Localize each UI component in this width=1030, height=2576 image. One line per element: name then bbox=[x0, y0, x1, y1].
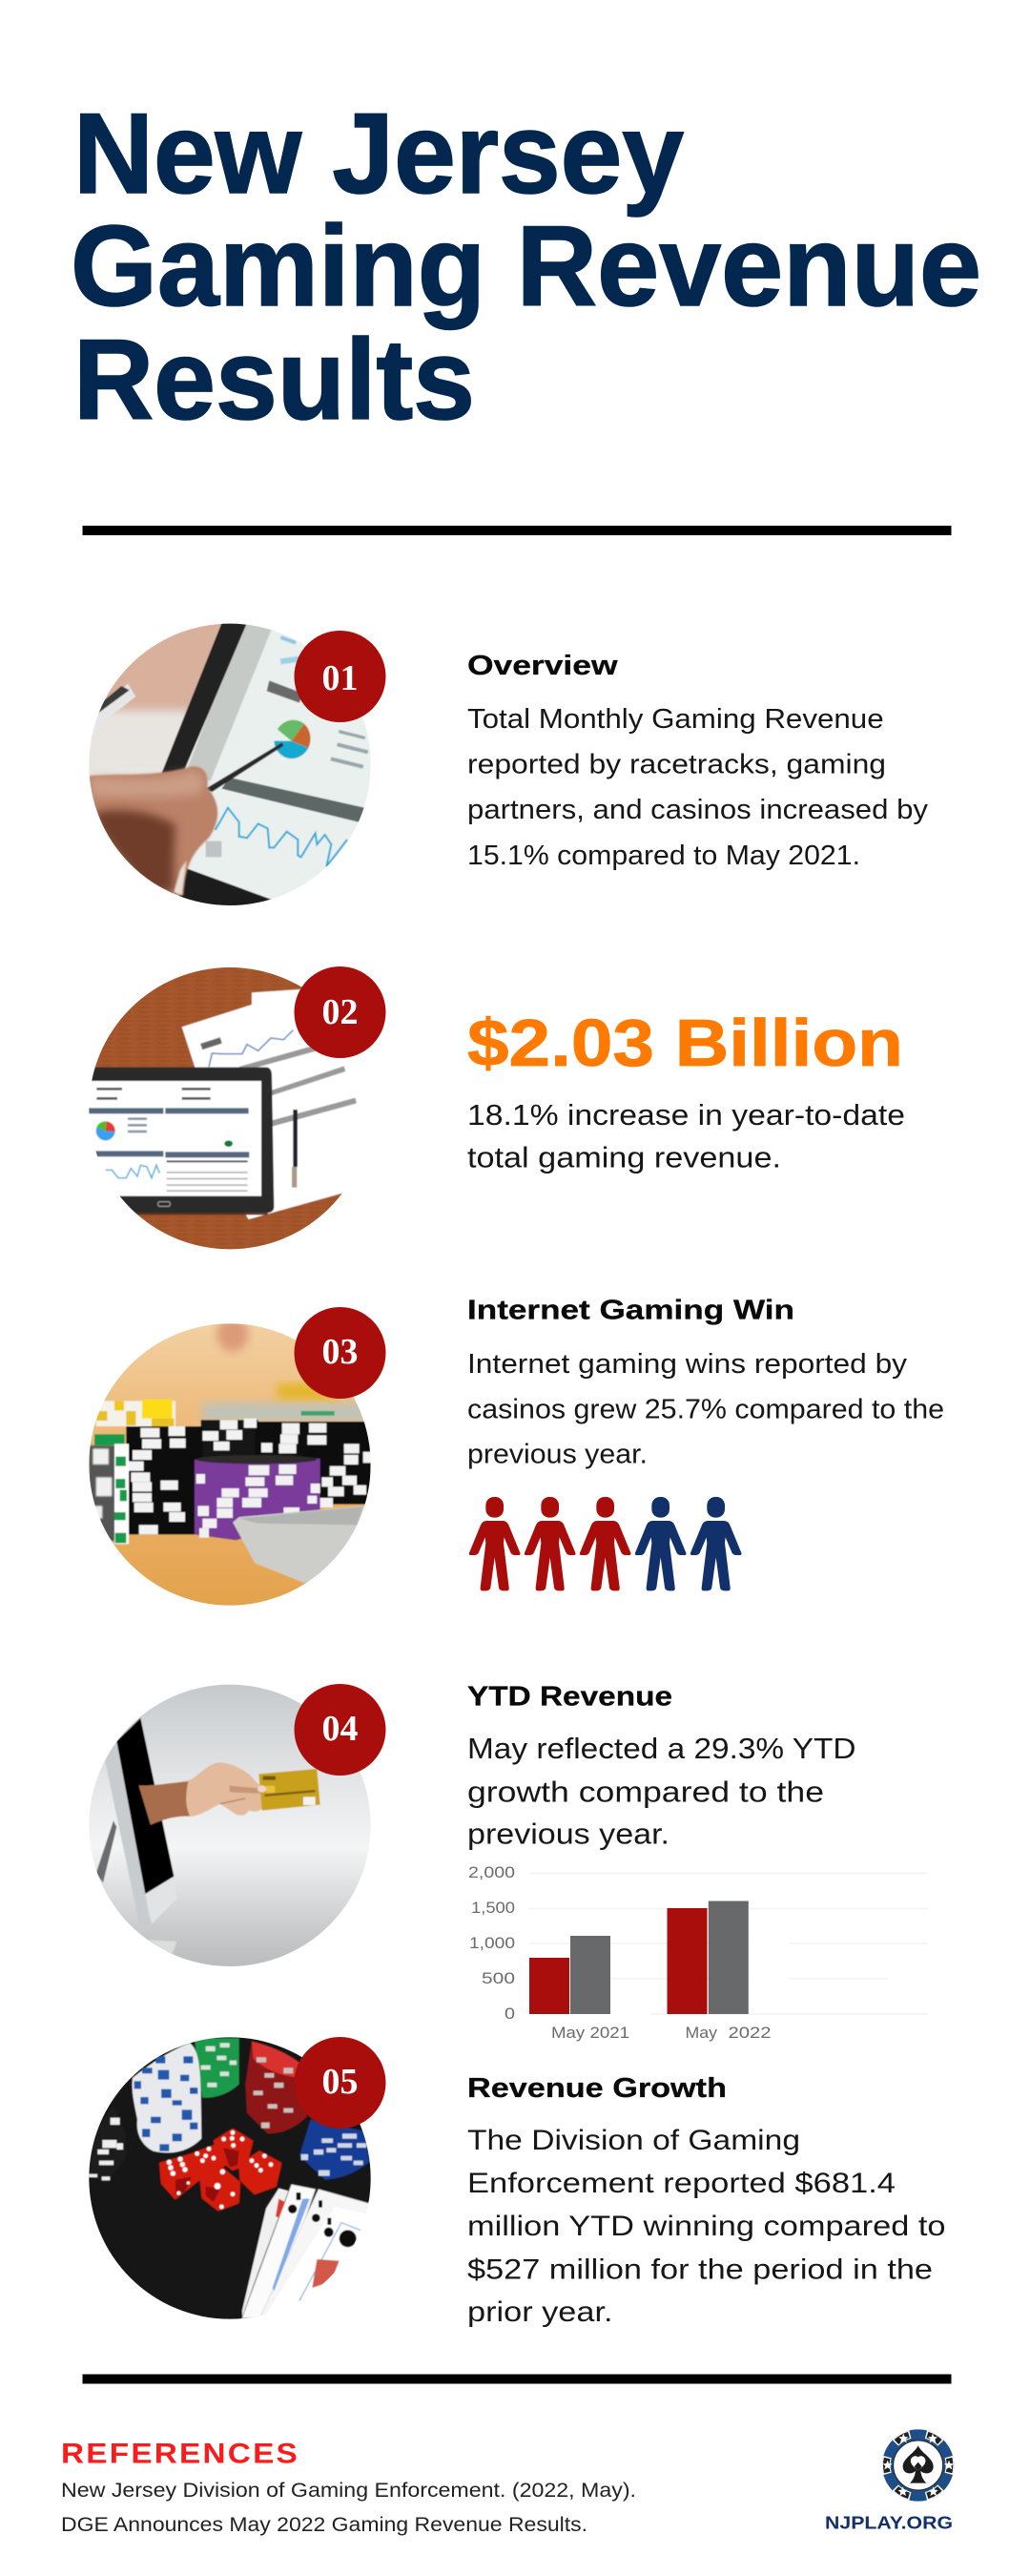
text: internet gaming win: Internet Gaming Win bbox=[467, 1296, 794, 1326]
badge 02: 02 bbox=[322, 992, 359, 1032]
logo: NJPLAY.ORG bbox=[825, 2429, 954, 2532]
text: ytd revenue: previous year. bbox=[467, 1817, 670, 1851]
y-axis labels: 1,000 bbox=[469, 1934, 515, 1952]
badge 04: 04 bbox=[322, 1709, 359, 1749]
x-axis labels: May 2021 bbox=[551, 2024, 629, 2042]
y-axis labels: 500 bbox=[482, 1969, 515, 1987]
text: internet gaming win: previous year. bbox=[467, 1439, 648, 1469]
panel: 03 internet gaming win bbox=[80, 1296, 944, 1617]
text: ytd revenue: May reflected a 29.3% YTD bbox=[467, 1732, 856, 1765]
text: overview: 15.1% compared to May 2021. bbox=[467, 841, 860, 871]
text: ytd revenue: growth compared to the bbox=[467, 1775, 824, 1809]
photo: hand pointing at analytics tablet bbox=[89, 624, 370, 905]
text: overview: Total Monthly Gaming Revenue bbox=[467, 704, 884, 735]
text: overview: Overview bbox=[467, 651, 618, 681]
icon: poker chip with spade bbox=[882, 2429, 954, 2502]
panel: 01 overview bbox=[80, 615, 929, 921]
badge 01: 01 bbox=[322, 658, 359, 698]
text: internet gaming win bbox=[467, 1296, 944, 1469]
text: revenue growth: Enforcement reported $681.4 bbox=[467, 2168, 896, 2199]
badge 03: 03 bbox=[322, 1332, 359, 1372]
text: revenue growth: Revenue Growth bbox=[467, 2073, 727, 2104]
references: New Jersey Division of Gaming Enforcement. (2022, May). bbox=[61, 2480, 636, 2502]
text: internet gaming win: casinos grew 25.7% compared to the bbox=[467, 1395, 944, 1425]
panel: 02 total revenue bbox=[80, 962, 905, 1267]
icon: person red 2 bbox=[525, 1497, 575, 1590]
title bbox=[71, 90, 981, 444]
photo: hand with credit card reaching out of monitor bbox=[90, 1685, 370, 1966]
bars May 2022 bbox=[668, 1901, 749, 2014]
icon: person blue 1 bbox=[635, 1497, 686, 1590]
badge 01 bbox=[294, 631, 385, 722]
bars May 2021 bbox=[529, 1936, 610, 2014]
dice bbox=[161, 2130, 279, 2209]
text: $2.03 billion: total gaming revenue. bbox=[467, 1141, 781, 1174]
badge 05: 05 bbox=[322, 2062, 359, 2102]
y-axis labels bbox=[468, 1863, 515, 2023]
text: overview: reported by racetracks, gaming bbox=[467, 750, 886, 780]
x-axis labels bbox=[551, 2024, 771, 2042]
badge 03 bbox=[294, 1307, 385, 1399]
bar chart: revenue May 2021 vs May 2022 bbox=[468, 1863, 927, 2042]
title: Results bbox=[73, 316, 475, 444]
text: overview bbox=[467, 651, 929, 871]
icon: person red 1 bbox=[469, 1497, 520, 1590]
references bbox=[61, 2439, 636, 2536]
text: $2.03 billion: 18.1% increase in year-to-date bbox=[467, 1098, 905, 1132]
photo: stacks of casino chips bbox=[89, 1323, 371, 1606]
text: revenue growth: $527 million for the period in the bbox=[467, 2254, 933, 2286]
references: REFERENCES bbox=[61, 2439, 299, 2469]
y-axis labels: 0 bbox=[505, 2005, 515, 2023]
text: revenue growth bbox=[467, 2073, 946, 2328]
y-axis labels: 1,500 bbox=[471, 1899, 515, 1917]
title: Gaming Revenue bbox=[71, 202, 981, 330]
text: internet gaming win: Internet gaming wins reported by bbox=[467, 1349, 908, 1380]
photo: chips, dice and playing cards bbox=[89, 2037, 371, 2319]
badge 04 bbox=[294, 1684, 385, 1776]
text: revenue growth: prior year. bbox=[467, 2296, 612, 2328]
text: revenue growth: million YTD winning compared to bbox=[467, 2211, 946, 2242]
title: New Jersey bbox=[73, 90, 684, 218]
panel: 05 revenue growth bbox=[80, 2030, 946, 2336]
text: overview: partners, and casinos increased by bbox=[467, 795, 929, 825]
icon: person red 3 bbox=[580, 1497, 630, 1590]
text: $2.03 billion: $2.03 Billion bbox=[467, 1006, 903, 1080]
icon: person blue 2 bbox=[690, 1497, 741, 1590]
text: ytd revenue: YTD Revenue bbox=[467, 1681, 672, 1712]
x-axis labels: May bbox=[685, 2024, 718, 2042]
badge 05 bbox=[294, 2037, 385, 2129]
text: revenue growth: The Division of Gaming bbox=[467, 2125, 800, 2156]
cards bbox=[242, 2189, 288, 2316]
x-axis labels: 2022 bbox=[729, 2024, 771, 2042]
references: DGE Announces May 2022 Gaming Revenue Results. bbox=[61, 2514, 587, 2536]
panel: 04 ytd revenue bbox=[80, 1679, 927, 2042]
photo: tablet and reports on wooden desk bbox=[89, 967, 357, 1250]
logo: NJPLAY.ORG: NJPLAY.ORG bbox=[825, 2513, 953, 2532]
text: $2.03 billion bbox=[467, 1006, 905, 1174]
icon row: five people bbox=[469, 1497, 741, 1590]
y-axis labels: 2,000 bbox=[468, 1863, 515, 1881]
badge 02 bbox=[294, 966, 385, 1058]
text: ytd revenue bbox=[467, 1681, 856, 1851]
